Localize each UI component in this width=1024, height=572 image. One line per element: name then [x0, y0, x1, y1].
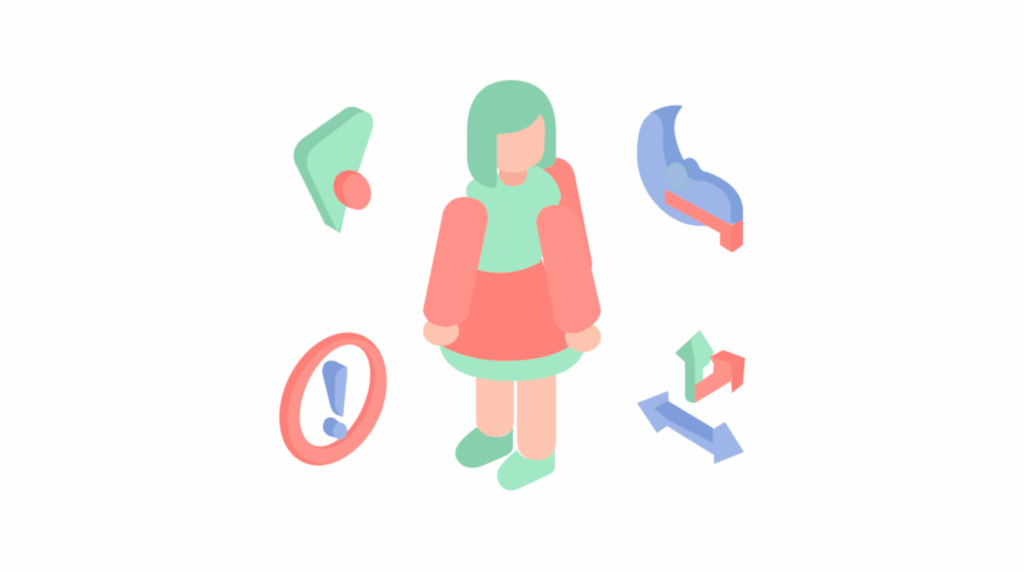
- right hand: [565, 322, 601, 352]
- icon: blue crescent and red base: [637, 105, 743, 252]
- left leg: [476, 365, 514, 437]
- left shoe: [455, 426, 513, 468]
- left arm: [423, 197, 488, 327]
- ring hole: [286, 334, 384, 457]
- red arrow side: [710, 350, 745, 393]
- red stripe: [665, 189, 731, 252]
- crescent face: [637, 112, 731, 226]
- central person figure: [423, 80, 601, 490]
- lens ellipse: [664, 161, 690, 191]
- cylinder face: [340, 172, 374, 212]
- icon: green triangle marker with red cylinder: [294, 107, 374, 233]
- blue arrow right head: [713, 422, 744, 464]
- green arrow light face: [691, 330, 714, 403]
- backpack: [530, 157, 592, 275]
- red arrow face: [695, 357, 733, 403]
- red dress: [440, 255, 572, 361]
- exclamation dot face: [333, 422, 347, 440]
- front hair: [467, 80, 556, 188]
- left hand: [423, 316, 459, 346]
- crescent extrusion: [650, 105, 743, 225]
- face: [497, 112, 545, 172]
- blue arrow shaft top: [654, 401, 713, 443]
- blue arrow lower body and left head: [637, 391, 714, 455]
- right leg: [517, 365, 556, 460]
- right arm: [536, 205, 601, 333]
- exclamation stem face: [335, 366, 347, 417]
- skirt hem: [439, 320, 587, 381]
- cylinder side: [333, 170, 366, 209]
- exclamation stem side: [322, 360, 347, 417]
- torso: [466, 166, 561, 273]
- marker side: [294, 107, 368, 233]
- green arrow dark side: [675, 330, 700, 403]
- right shoe: [497, 449, 555, 490]
- red side: [731, 220, 743, 252]
- marker face: [307, 112, 373, 233]
- ring face: [268, 322, 406, 480]
- icon: warning ring with exclamation mark: [258, 315, 408, 483]
- ring back: [258, 315, 408, 483]
- icon: crossing arrows: [637, 330, 745, 464]
- neck: [499, 165, 527, 186]
- ring inner wall: [286, 334, 390, 460]
- exclamation dot side: [323, 417, 347, 439]
- back hair: [515, 110, 556, 170]
